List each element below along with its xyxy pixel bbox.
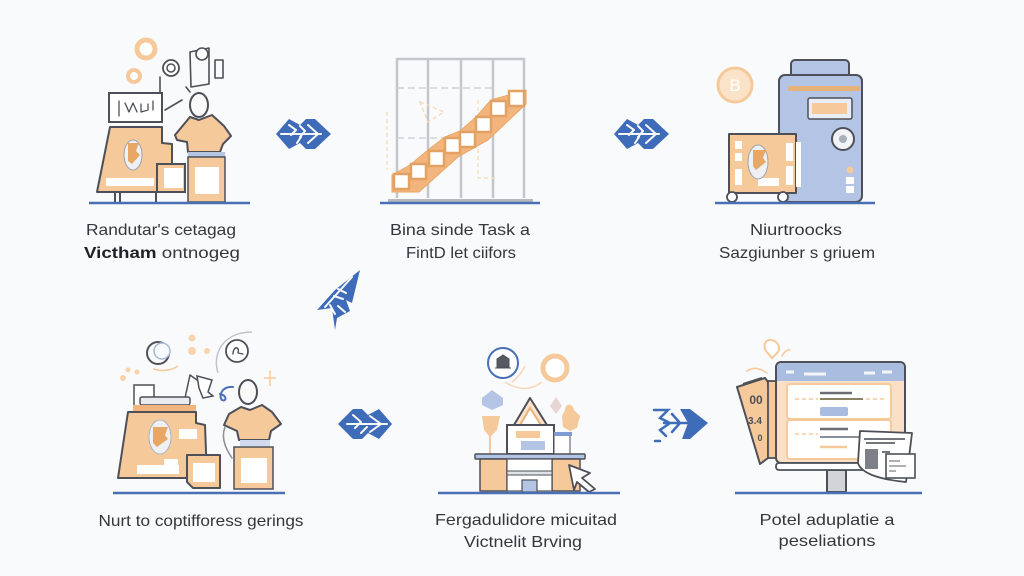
icon: small box: [157, 164, 185, 192]
text: step 1 caption: Randutar's cetagag: [86, 222, 236, 239]
text: step 2 caption: Bina sinde Task a: [390, 222, 530, 239]
arrow: step 1 to step 2: [276, 119, 331, 149]
icon: document: [858, 431, 915, 482]
icon: folder with papers: [737, 378, 777, 464]
text: step 1 caption: [84, 222, 240, 262]
arrow: step 2 to step 3: [614, 119, 669, 149]
icon: desk: [97, 127, 172, 202]
icon: floating gear symbols: [128, 40, 223, 110]
icon: laptop on desk: [133, 385, 196, 411]
chart: rising stair blocks: [392, 90, 526, 192]
text: step 6 caption: peseliations: [778, 533, 876, 550]
text: step 4 caption: Nurt to coptifforess gerings: [98, 513, 304, 530]
text: step 3 caption: [719, 222, 875, 262]
chart: background grid: [387, 59, 524, 198]
text: step 5 caption: Fergadulidore micuitad: [435, 512, 617, 529]
text: step 5 caption: Victnelit Brving: [464, 534, 582, 551]
panel: step 5: [435, 348, 620, 551]
icon: coin: B: [729, 76, 741, 95]
icon: monitor: [776, 362, 906, 492]
icon: folder with papers: 00: [749, 393, 763, 407]
panel: step 6: [735, 340, 922, 550]
panel: step 4: [98, 332, 304, 530]
text: step 5 caption: [435, 512, 617, 551]
icon: cart box: [727, 134, 801, 202]
arrow: diagonal return: [317, 270, 360, 330]
icon: small box: [187, 455, 220, 488]
text: step 2 caption: [390, 222, 530, 262]
icon: person: [175, 93, 231, 202]
icon: monitor: [109, 93, 162, 122]
text: step 3 caption: Sazgiunber s griuem: [719, 245, 875, 262]
text: step 1 caption: Victham ontnogeg: [84, 245, 240, 262]
icon: building: [475, 398, 585, 492]
icon: floating symbols: [482, 348, 580, 458]
icon: folder with papers: 3.4: [748, 416, 762, 427]
icon: desk: [118, 412, 207, 478]
arrow: step 5 to step 4: [338, 409, 392, 439]
icon: folder with papers: 0: [757, 433, 763, 443]
panel: step 1: [84, 40, 250, 262]
icon: person: [223, 380, 281, 489]
text: step 2 caption: FintD let ciifors: [406, 245, 516, 262]
icon: pin and squiggles: [747, 340, 790, 373]
panel: step 3: [715, 60, 875, 262]
arrow: step 5 to step 6: [654, 409, 708, 441]
icon: coin: [718, 68, 752, 102]
text: step 3 caption: Niurtroocks: [750, 222, 842, 239]
icon: cursor: [569, 465, 595, 492]
text: step 6 caption: [760, 512, 895, 550]
icon: blue cabinet: [779, 60, 862, 202]
icon: floating symbols: [120, 332, 276, 400]
text: step 6 caption: Potel aduplatie a: [760, 512, 895, 529]
panel: step 2: [380, 59, 540, 262]
